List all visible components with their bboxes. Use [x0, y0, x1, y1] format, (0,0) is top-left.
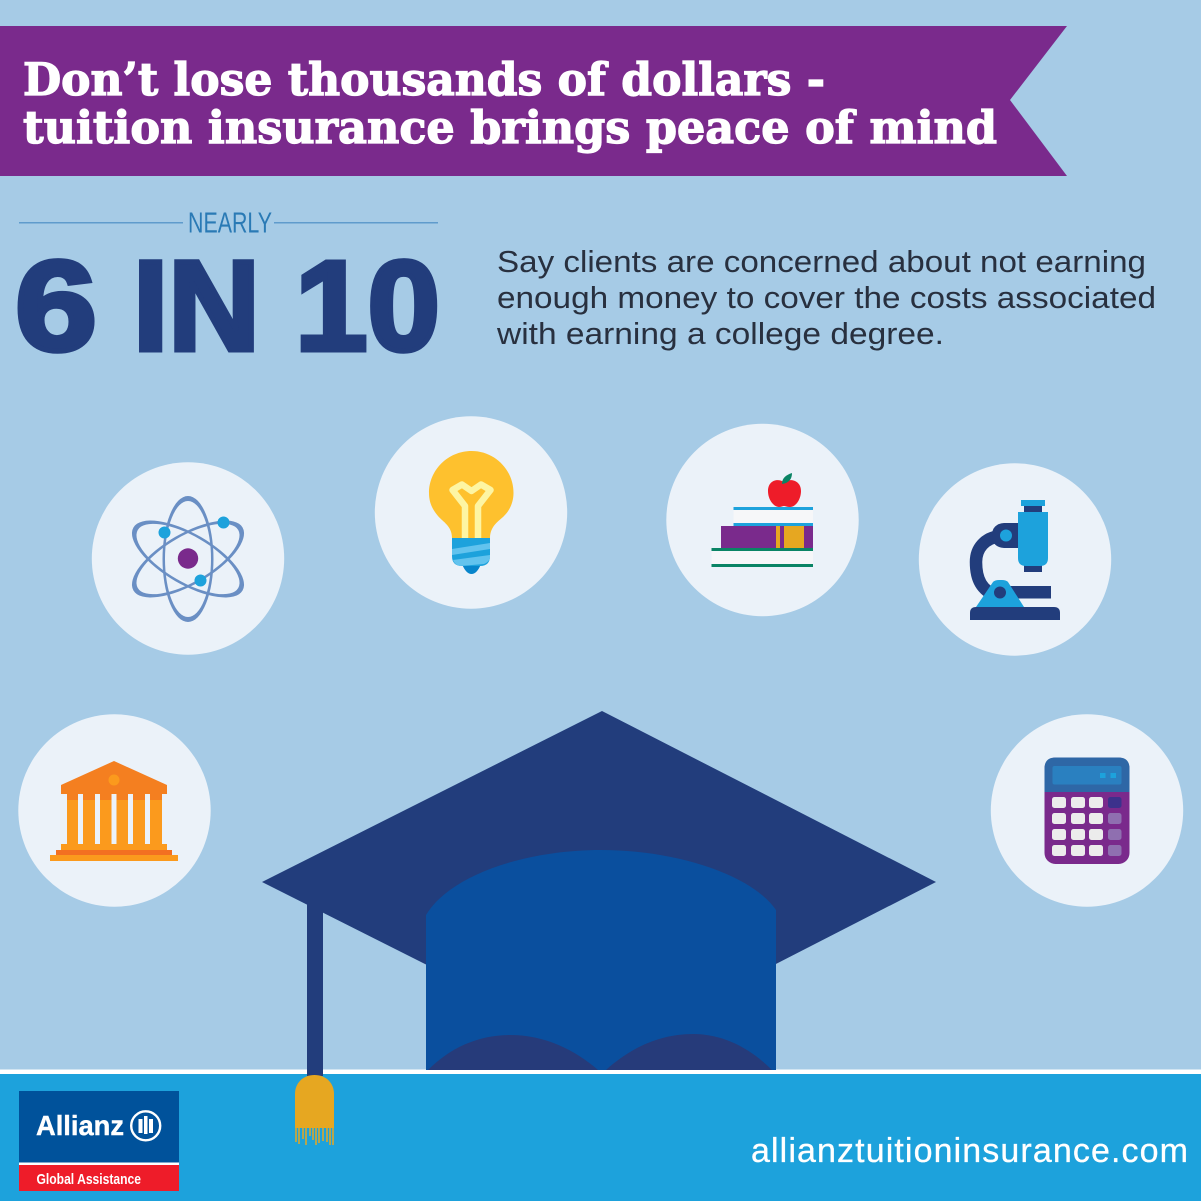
icon: bank building	[18, 714, 211, 907]
statistic: nearly 6 in 10	[15, 208, 440, 378]
statistic: nearly 6 in 10: NEARLY	[188, 208, 272, 240]
heading: banner title	[23, 53, 997, 154]
website url: allianztuitioninsurance.com	[751, 1132, 1188, 1170]
text block: statistic description	[496, 244, 1156, 351]
statistic: nearly 6 in 10: 10	[295, 235, 440, 378]
heading: banner title: tuition insurance brings peace of mind	[23, 101, 997, 154]
text block: statistic description: with earning a college degree.	[496, 316, 944, 351]
icon: light bulb	[375, 416, 567, 609]
text block: statistic description: Say clients are concerned about not earning	[497, 244, 1146, 279]
statistic: nearly 6 in 10: IN	[133, 235, 260, 378]
icon: books and apple	[666, 424, 859, 616]
logo: Allianz Global Assistance	[19, 1091, 179, 1191]
icon: calculator	[991, 714, 1183, 907]
logo: Allianz Global Assistance: Global Assistance	[36, 1171, 141, 1188]
icon: Allianz eagle roundel	[131, 1111, 160, 1140]
logo: Allianz Global Assistance: Allianz	[36, 1110, 124, 1141]
heading: banner title: Don’t lose thousands of dollars -	[23, 53, 825, 106]
tassel	[295, 1075, 334, 1145]
footer band	[0, 1070, 1201, 1201]
icon: atom	[92, 462, 284, 655]
statistic: nearly 6 in 10: 6	[15, 235, 97, 378]
text block: statistic description: enough money to cover the costs associated	[497, 280, 1156, 315]
graduation cap	[262, 711, 936, 1145]
banner: headline ribbon	[0, 26, 1067, 176]
icon: microscope	[919, 463, 1111, 656]
